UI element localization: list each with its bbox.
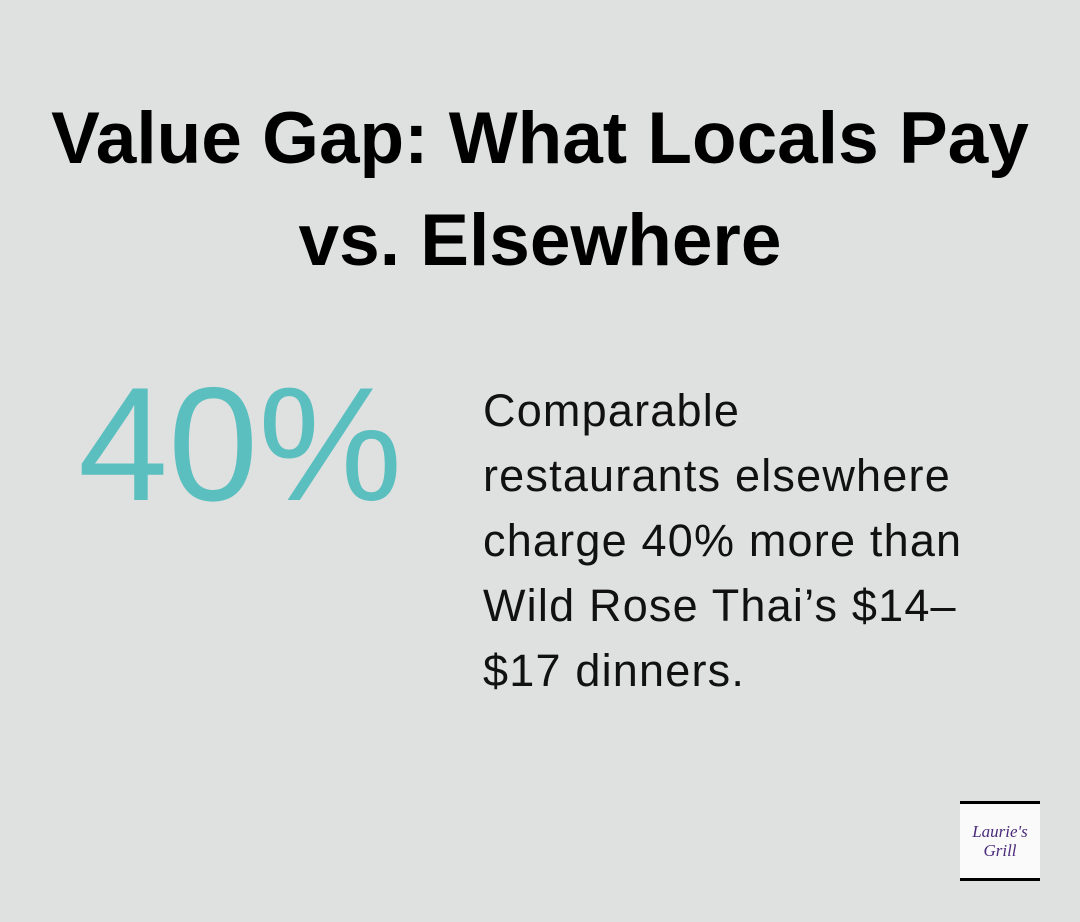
description text: charge 40% more than xyxy=(483,515,962,566)
logo: Grill xyxy=(983,841,1017,860)
description text: Comparable xyxy=(483,385,740,436)
title: vs. Elsewhere xyxy=(299,200,781,281)
big stat: 40% xyxy=(78,354,402,535)
logo xyxy=(960,801,1040,881)
logo: Laurie's xyxy=(972,822,1028,841)
title: Value Gap: What Locals Pay xyxy=(51,98,1029,179)
description text: restaurants elsewhere xyxy=(483,450,951,501)
description text: $17 dinners. xyxy=(483,645,745,696)
description text xyxy=(483,385,962,696)
title xyxy=(51,98,1029,281)
description text: Wild Rose Thai’s $14– xyxy=(483,580,957,631)
